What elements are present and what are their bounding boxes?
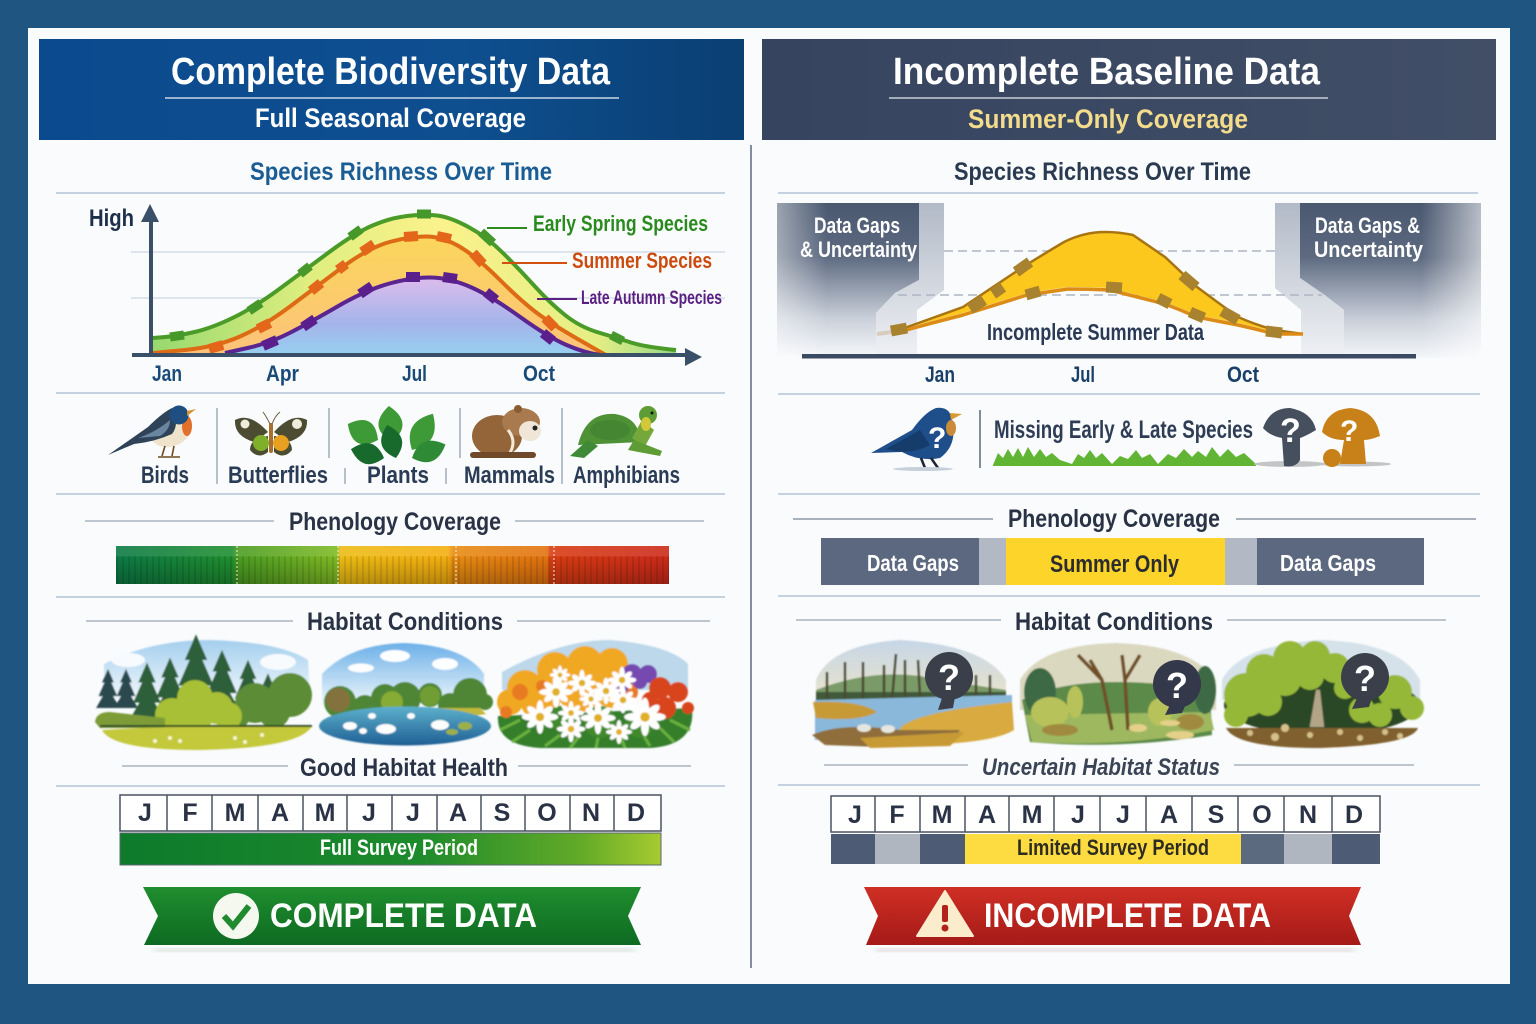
month grid: limited survey: N <box>1299 801 1317 829</box>
month grid: full survey: M <box>225 799 245 827</box>
chart: incomplete summer data: Uncertainty <box>1314 237 1424 262</box>
chart: incomplete summer data: Oct <box>1227 362 1260 387</box>
banner: incomplete data: INCOMPLETE DATA <box>984 897 1271 935</box>
species icon row: Plants <box>367 462 429 489</box>
icon: mammal <box>470 405 541 458</box>
month grid: limited survey: S <box>1208 801 1224 829</box>
habitat heading: Habitat Conditions <box>307 608 503 636</box>
phenology heading: Phenology Coverage <box>289 508 501 536</box>
chart: incomplete summer data: & Uncertainty <box>800 237 918 262</box>
month grid: full survey: O <box>537 799 557 827</box>
scene: wildflowers <box>497 640 694 748</box>
icon: check mark <box>213 893 259 939</box>
chart: incomplete summer data: Data Gaps <box>814 213 900 238</box>
month grid: limited survey <box>831 796 1380 864</box>
phenology bar <box>116 546 669 584</box>
phenology bar: summer only: Data Gaps <box>867 550 959 576</box>
icon: plants <box>342 405 449 468</box>
left header: Full Seasonal Coverage <box>255 103 526 133</box>
icon: warning triangle <box>917 891 973 936</box>
month grid: limited survey: M <box>932 801 952 829</box>
phenology heading: Phenology Coverage <box>1008 505 1220 533</box>
icon: gray mushroom <box>1254 408 1326 467</box>
month grid: limited survey: J <box>1071 801 1085 829</box>
month grid: full survey: A <box>271 799 289 827</box>
icon: butterfly <box>235 412 307 456</box>
month grid: full survey <box>120 795 661 865</box>
line chart: species richness: Jan <box>152 361 182 386</box>
line chart: species richness: Early Spring Species <box>533 211 708 236</box>
missing species row <box>871 408 1391 471</box>
month grid: full survey: F <box>182 799 198 827</box>
month grid: limited survey: A <box>978 801 996 829</box>
species icon row: Amphibians <box>573 462 680 489</box>
icon: question bubble 1 <box>925 652 973 710</box>
species icon row: Mammals <box>464 462 555 489</box>
month grid: full survey: J <box>138 799 152 827</box>
month grid: limited survey: F <box>889 801 905 829</box>
chart: incomplete summer data: Incomplete Summer Data <box>987 319 1204 345</box>
left header <box>39 39 744 140</box>
caption: good habitat health: Good Habitat Health <box>300 754 508 782</box>
icon: question bubble 3: ? <box>1354 658 1376 699</box>
icon: bird with question mark: ? <box>928 422 946 455</box>
grass <box>993 447 1256 466</box>
right header: Incomplete Baseline Data <box>893 51 1321 93</box>
month grid: limited survey: D <box>1345 801 1363 829</box>
panel: complete data (left) <box>39 39 744 952</box>
icon: question bubble 1: ? <box>938 657 960 698</box>
scene: stressed tree <box>1222 640 1424 748</box>
chart: incomplete summer data: Jul <box>1071 362 1095 387</box>
month grid: limited survey: M <box>1022 801 1042 829</box>
line chart: species richness: Jul <box>402 361 427 386</box>
line chart: species richness: High <box>89 205 134 232</box>
chart: incomplete summer data: Data Gaps & <box>1315 213 1420 238</box>
scene: degraded woodland <box>1020 643 1216 745</box>
species icon row: Birds <box>141 462 189 489</box>
scene: drying wetland <box>812 640 1014 748</box>
month grid: limited survey: Limited Survey Period <box>1017 835 1209 860</box>
month grid: limited survey: J <box>848 801 862 829</box>
month grid: full survey: J <box>362 799 376 827</box>
icon: question bubble 2 <box>1153 660 1201 715</box>
banner: complete data: COMPLETE DATA <box>270 897 537 935</box>
line chart: species richness: Oct <box>523 361 556 386</box>
month grid: full survey: Full Survey Period <box>320 835 478 860</box>
phenology bar: summer only: Data Gaps <box>1280 550 1376 576</box>
line chart: species richness <box>89 204 725 386</box>
phenology bar: summer only: Summer Only <box>1050 551 1180 578</box>
month grid: limited survey: A <box>1160 801 1178 829</box>
month grid: full survey: N <box>582 799 600 827</box>
icon: turtle <box>570 406 662 458</box>
center divider <box>750 145 752 968</box>
month grid: limited survey: O <box>1252 801 1272 829</box>
month grid: full survey: A <box>449 799 467 827</box>
month grid: full survey: D <box>627 799 645 827</box>
icon: orange mushroom <box>1319 408 1391 467</box>
scene: pond <box>319 643 493 746</box>
month grid: limited survey: J <box>1116 801 1130 829</box>
icon: bird with question mark <box>871 408 962 471</box>
line chart: species richness: Late Autumn Species <box>581 288 722 309</box>
icon: bird <box>108 406 196 457</box>
right header <box>762 39 1496 140</box>
banner: complete data <box>143 887 641 952</box>
heading: species richness: Species Richness Over Time <box>250 158 552 186</box>
icon: orange mushroom: ? <box>1340 415 1358 448</box>
phenology bar: summer only <box>821 538 1424 585</box>
chart: incomplete summer data: Jan <box>925 362 955 387</box>
panel: incomplete data (right) <box>762 39 1496 952</box>
line chart: species richness: Apr <box>266 361 299 386</box>
habitat heading: Habitat Conditions <box>1015 608 1213 636</box>
heading: species richness: Species Richness Over Time <box>954 158 1251 186</box>
species icon row: Butterflies <box>228 462 328 489</box>
month grid: full survey: J <box>406 799 420 827</box>
caption: uncertain habitat status: Uncertain Habitat Status <box>982 754 1220 781</box>
species icon row <box>108 405 680 489</box>
scene: forest and meadow <box>95 634 312 750</box>
icon: question bubble 3 <box>1341 653 1389 709</box>
chart: incomplete summer data <box>777 203 1481 387</box>
left header: Complete Biodiversity Data <box>171 51 611 93</box>
missing species row: Missing Early & Late Species <box>994 416 1253 444</box>
right header: Summer-Only Coverage <box>968 104 1248 134</box>
month grid: full survey: S <box>494 799 510 827</box>
icon: question bubble 2: ? <box>1166 665 1188 706</box>
month grid: full survey: M <box>315 799 335 827</box>
line chart: species richness: Summer Species <box>572 248 712 273</box>
icon: gray mushroom: ? <box>1280 412 1301 450</box>
banner: incomplete data <box>864 887 1361 952</box>
